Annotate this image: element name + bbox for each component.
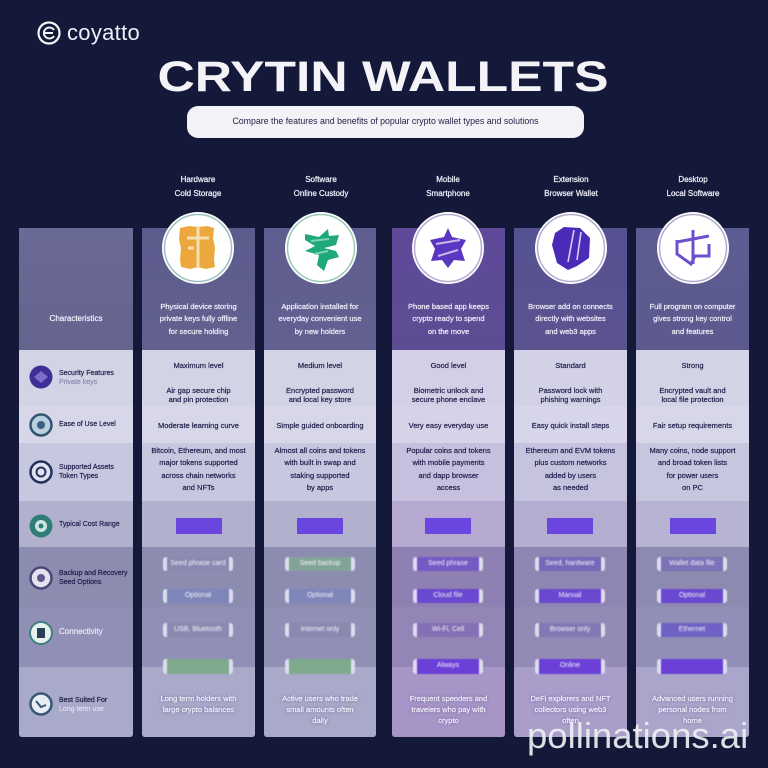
row: security: Password lock with	[539, 386, 602, 395]
price tag	[425, 518, 471, 534]
price tag	[670, 518, 716, 534]
pill	[163, 557, 233, 571]
row: connectivity	[392, 607, 505, 667]
row: security	[264, 350, 376, 406]
row: assets	[142, 443, 255, 501]
row: security: Encrypted vault and	[659, 386, 726, 395]
row: best for: Frequent spenders and	[410, 694, 487, 703]
row: ease	[392, 406, 505, 443]
column heading: software: Online Custody	[294, 189, 348, 198]
pill	[657, 623, 727, 637]
label row: supported assets	[19, 443, 133, 501]
row: assets: by apps	[307, 483, 333, 492]
label row: ease of use	[19, 406, 133, 443]
panel: extension wallet	[514, 228, 627, 737]
logo: coyatto	[67, 20, 140, 45]
label row: backup: Seed Options	[59, 579, 101, 586]
label row: ease of use: Ease of Use Level	[59, 421, 116, 428]
pill	[413, 589, 483, 603]
label row: supported assets: Supported Assets	[59, 464, 114, 471]
pill	[535, 589, 605, 603]
label row: backup	[19, 547, 133, 607]
row: security: Medium level	[298, 361, 342, 370]
column heading: hardware	[174, 175, 222, 198]
panel header: and features	[672, 327, 713, 336]
row: assets	[392, 443, 505, 501]
panel header: gives strong key control	[653, 314, 732, 323]
row: assets: across chain networks	[161, 471, 236, 480]
pill	[285, 557, 355, 571]
pill	[163, 659, 233, 674]
row: assets: with mobile payments	[412, 458, 485, 467]
label row: best for: Best Suited For	[59, 697, 107, 704]
row: ease: Simple guided onboarding	[276, 421, 364, 430]
label row: supported assets: Token Types	[59, 473, 98, 480]
row: assets: added by users	[545, 471, 596, 480]
row: backup	[514, 547, 627, 607]
icon: desktop badge	[657, 212, 729, 284]
pill: Optional	[679, 592, 705, 599]
row: assets: with built in swap and	[284, 458, 356, 467]
label row: connectivity: Connectivity	[59, 627, 103, 636]
panel header	[636, 228, 749, 350]
row: backup	[392, 547, 505, 607]
pill	[285, 659, 355, 674]
row: best for: Advanced users running	[652, 694, 733, 703]
label row: best for	[19, 667, 133, 737]
row: backup	[142, 547, 255, 607]
row: best for: Active users who trade	[282, 694, 358, 703]
row: assets: for power users	[667, 471, 718, 480]
row: security: Maximum level	[173, 361, 224, 370]
pill: Manual	[559, 592, 581, 599]
panel header: Physical device storing	[160, 302, 237, 311]
panel header: by new holders	[295, 327, 345, 336]
row: ease: Very easy everyday use	[409, 421, 488, 430]
row: assets: and dapp browser	[418, 471, 479, 480]
pill: Seed phrase	[428, 560, 468, 567]
row: best for: small amounts often	[286, 705, 354, 714]
label row: backup: Backup and Recovery	[59, 570, 127, 577]
icon: extension badge	[535, 212, 607, 284]
panel header: for secure holding	[169, 327, 228, 336]
panel header: Full program on computer	[650, 302, 735, 311]
pill: Seed backup	[300, 560, 340, 567]
pill	[413, 557, 483, 571]
icon: software badge	[285, 212, 357, 284]
pill: Wallet data file	[669, 560, 715, 567]
panel header: on the move	[428, 327, 469, 336]
panel header: everyday convenient use	[279, 314, 361, 323]
row: connectivity	[142, 607, 255, 667]
row: assets: Bitcoin, Ethereum, and most	[151, 446, 246, 455]
row: security: Biometric unlock and	[414, 386, 483, 395]
panel: software wallet	[264, 228, 376, 737]
row: cost	[142, 501, 255, 547]
row: cost	[264, 501, 376, 547]
label row: security: Security Features	[59, 370, 114, 377]
pill: Wi-Fi, Cell	[432, 626, 464, 633]
row: security: and local key store	[289, 395, 351, 404]
pill	[413, 623, 483, 637]
label row: cost: Typical Cost Range	[59, 521, 120, 528]
row: best for	[392, 667, 505, 737]
row: security: Strong	[681, 361, 704, 370]
pill	[413, 659, 483, 674]
row: best for: Long term holders with	[161, 694, 236, 703]
row: security: Standard	[555, 361, 586, 370]
row: ease	[142, 406, 255, 443]
row: security	[392, 350, 505, 406]
row: backup	[636, 547, 749, 607]
label row: security	[19, 350, 133, 406]
icon: hardware badge	[162, 212, 234, 284]
row: best for: home	[683, 716, 702, 725]
row: connectivity	[636, 607, 749, 667]
column heading: mobile	[426, 175, 470, 198]
price tag	[547, 518, 593, 534]
column heading: desktop: Local Software	[667, 189, 719, 198]
row: assets: Many coins, node support	[650, 446, 735, 455]
column heading: extension	[544, 175, 598, 198]
panel header: directly with websites	[535, 314, 606, 323]
row: security	[514, 350, 627, 406]
label row: cost	[19, 501, 133, 547]
row: best for: often	[562, 716, 579, 725]
row: best for: crypto	[438, 716, 459, 725]
row: connectivity	[514, 607, 627, 667]
row: ease: Easy quick install steps	[532, 421, 609, 430]
pill: Cloud file	[433, 592, 463, 599]
pill	[535, 623, 605, 637]
row: best for: travelers who pay with	[411, 705, 486, 714]
column heading: desktop: Desktop	[678, 175, 708, 184]
row: assets: staking supported	[290, 471, 350, 480]
row: security: secure phone enclave	[412, 395, 485, 404]
watermark: pollinations.ai	[527, 715, 748, 756]
row: assets: access	[437, 483, 460, 492]
pill: Internet only	[301, 626, 339, 633]
row: best for	[636, 667, 749, 737]
row: best for: daily	[312, 716, 328, 725]
label row: best for: Long term use	[59, 706, 104, 713]
column heading: mobile: Mobile	[436, 175, 460, 184]
column heading: software	[294, 175, 348, 198]
row: best for: personal nodes from	[658, 705, 727, 714]
column heading: software: Software	[305, 175, 337, 184]
panel: mobile wallet	[392, 228, 505, 737]
title: CRYTIN WALLETS	[157, 53, 609, 101]
row: assets: Almost all coins and tokens	[275, 446, 365, 455]
row: ease: Moderate learning curve	[158, 421, 239, 430]
row: cost	[636, 501, 749, 547]
pill: Ethernet	[679, 626, 705, 633]
feature header: Characteristics	[50, 314, 102, 323]
pill	[657, 659, 727, 674]
row: ease	[636, 406, 749, 443]
row: best for: DeFi explorers and NFT	[530, 694, 611, 703]
pill: Browser only	[550, 626, 590, 633]
row: best for	[514, 667, 627, 737]
row: assets: as needed	[553, 483, 588, 492]
panel: desktop wallet	[636, 228, 749, 737]
price tag	[176, 518, 222, 534]
row: ease	[514, 406, 627, 443]
row: assets	[264, 443, 376, 501]
pill	[535, 557, 605, 571]
row: backup	[264, 547, 376, 607]
row: assets: Ethereum and EVM tokens	[526, 446, 615, 455]
pill: Always	[437, 662, 459, 669]
label row: connectivity	[19, 607, 133, 667]
pill: Optional	[185, 592, 211, 599]
row: best for	[142, 667, 255, 737]
row: cost	[392, 501, 505, 547]
row: assets: Popular coins and tokens	[406, 446, 491, 455]
icon: mobile badge	[412, 212, 484, 284]
column heading: hardware: Hardware	[181, 175, 215, 184]
column heading: mobile: Smartphone	[426, 189, 470, 198]
row: security: Good level	[431, 361, 466, 370]
pill	[285, 623, 355, 637]
panel header	[142, 228, 255, 350]
row: assets: and NFTs	[182, 483, 215, 492]
row: assets	[514, 443, 627, 501]
pill	[657, 589, 727, 603]
panel header: and web3 apps	[545, 327, 596, 336]
pill: Online	[560, 662, 580, 669]
label row: security: Private keys	[59, 379, 97, 386]
panel header: Phone based app keeps	[408, 302, 489, 311]
price tag	[297, 518, 343, 534]
row: security: Air gap secure chip	[166, 386, 231, 395]
row: best for: collectors using web3	[535, 705, 606, 714]
panel: feature labels	[19, 228, 133, 737]
column heading: extension: Browser Wallet	[544, 189, 598, 198]
pill	[535, 659, 605, 674]
pill	[657, 557, 727, 571]
pill: Seed phrase card	[170, 560, 226, 567]
column heading: desktop	[667, 175, 720, 198]
row: ease	[264, 406, 376, 443]
row: security	[142, 350, 255, 406]
panel header: Browser add on connects	[528, 302, 613, 311]
panel header: crypto ready to spend	[412, 314, 485, 323]
row: connectivity	[264, 607, 376, 667]
row: assets: on PC	[682, 483, 703, 492]
row: ease: Fair setup requirements	[653, 421, 732, 430]
row: security: local file protection	[661, 395, 724, 404]
pill	[285, 589, 355, 603]
feature header	[19, 228, 133, 350]
subtitle pill: Compare the features and benefits of popular crypto wallet types and solutions	[232, 116, 539, 126]
row: assets: and broad token lists	[658, 458, 727, 467]
panel header: Application installed for	[281, 302, 359, 311]
column heading: extension: Extension	[553, 175, 589, 184]
row: assets: major tokens supported	[159, 458, 238, 467]
row: assets: plus custom networks	[534, 458, 607, 467]
pill	[163, 589, 233, 603]
pill: Optional	[307, 592, 333, 599]
subtitle pill	[187, 106, 584, 138]
row: best for	[264, 667, 376, 737]
row: security: Encrypted password	[286, 386, 354, 395]
pill	[163, 623, 233, 637]
row: security: phishing warnings	[540, 395, 601, 404]
column heading: hardware: Cold Storage	[175, 189, 221, 198]
row: cost	[514, 501, 627, 547]
panel header	[392, 228, 505, 350]
panel header	[514, 228, 627, 350]
panel header	[264, 228, 376, 350]
row: assets	[636, 443, 749, 501]
row: security: and pin protection	[169, 395, 228, 404]
row: best for: large crypto balances	[163, 705, 234, 714]
panel header: private keys fully offline	[160, 314, 237, 323]
panel: hardware wallet	[142, 228, 255, 737]
row: security	[636, 350, 749, 406]
pill: USB, Bluetooth	[174, 626, 222, 633]
pill: Seed, hardware	[545, 560, 595, 567]
